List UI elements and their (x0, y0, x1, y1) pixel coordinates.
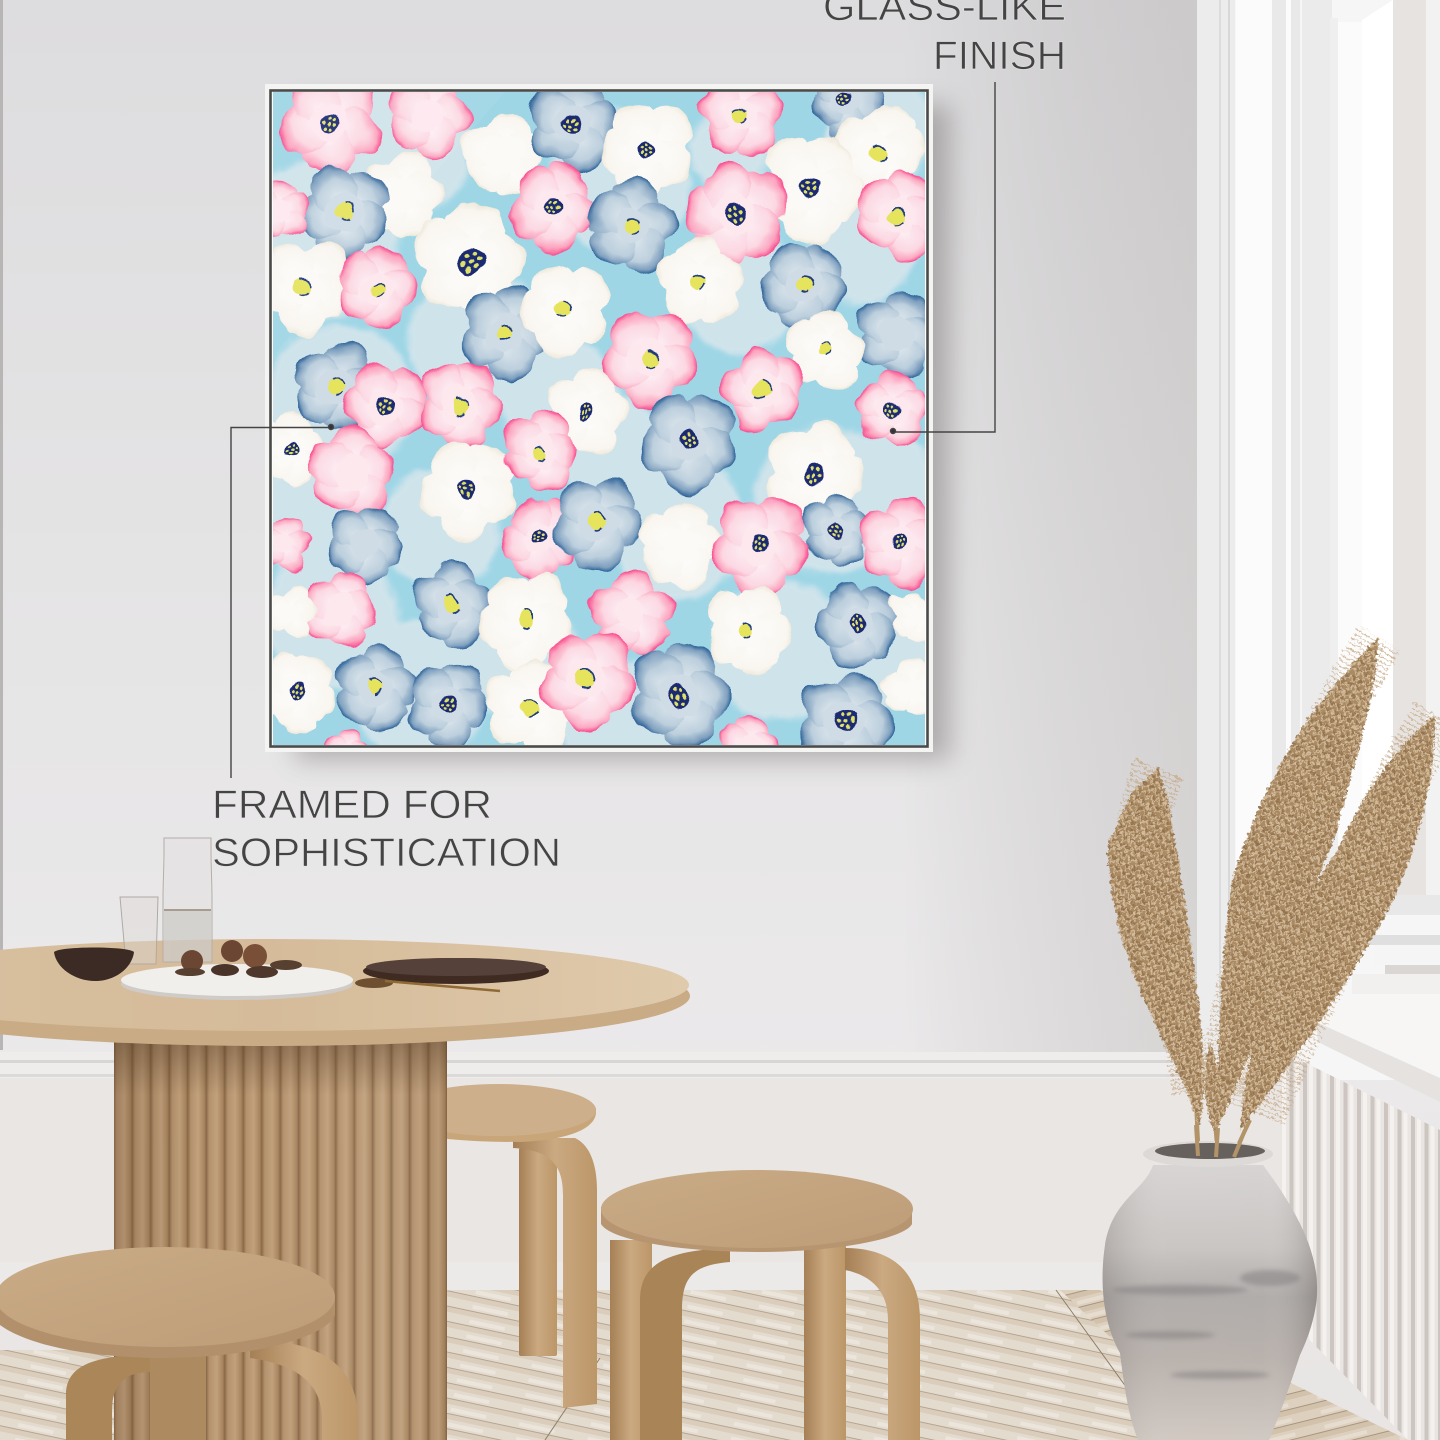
vase body (1103, 1165, 1317, 1440)
pampas grass (1106, 636, 1436, 1158)
frame shadow (295, 105, 950, 760)
dado rail (0, 1052, 1180, 1078)
callout text: framed for sophistication: FRAMED FOR (212, 783, 492, 827)
pampas plumes (1106, 636, 1433, 1130)
window frame and panes (1197, 0, 1440, 1080)
stone vase (1103, 1141, 1317, 1440)
vase rim (1143, 1141, 1273, 1167)
callout text: glass-like finish (823, 0, 1066, 78)
herringbone floor (0, 1290, 1408, 1440)
front right stool (601, 1170, 920, 1440)
round table top (0, 939, 690, 1046)
framed painting (265, 84, 963, 774)
callout text: glass-like finish: FINISH (933, 34, 1066, 78)
brass spoons (355, 978, 500, 991)
marble plate (121, 964, 353, 1000)
fluted table column (114, 1030, 447, 1440)
pampas fringe barbs (1138, 637, 1436, 1110)
nuts on plate (175, 940, 302, 978)
callout text: framed for sophistication (212, 783, 561, 875)
window books (1352, 935, 1440, 994)
vase texture (1112, 1270, 1300, 1379)
front left stool (0, 1247, 358, 1440)
callout text: framed for sophistication: SOPHISTICATION (212, 831, 561, 875)
left stool legs (66, 1340, 358, 1440)
lower wall (0, 1078, 1285, 1290)
dark wooden plate (363, 958, 549, 984)
foreground stems in vase (1196, 1125, 1245, 1157)
dark bowl (54, 948, 134, 981)
floral artwork (273, 92, 925, 745)
white frame (265, 84, 933, 752)
pale background washes (273, 92, 925, 745)
baseboard (0, 1262, 1110, 1290)
stems (1196, 1105, 1250, 1158)
radiator (1280, 1050, 1440, 1440)
dark inner gap (270, 90, 928, 746)
drinking glass (120, 897, 158, 964)
back stool legs (513, 1138, 597, 1408)
back stool seat (400, 1084, 596, 1142)
carafe (163, 838, 212, 962)
callout line: glass-like finish (890, 82, 995, 434)
right stool seat (601, 1170, 913, 1252)
window sill (1316, 995, 1440, 1102)
left stool seat (0, 1247, 335, 1358)
right stool legs (610, 1240, 920, 1440)
back stool (400, 1084, 597, 1408)
glass reflection (273, 92, 474, 296)
callout line: framed for sophistication (231, 424, 334, 778)
